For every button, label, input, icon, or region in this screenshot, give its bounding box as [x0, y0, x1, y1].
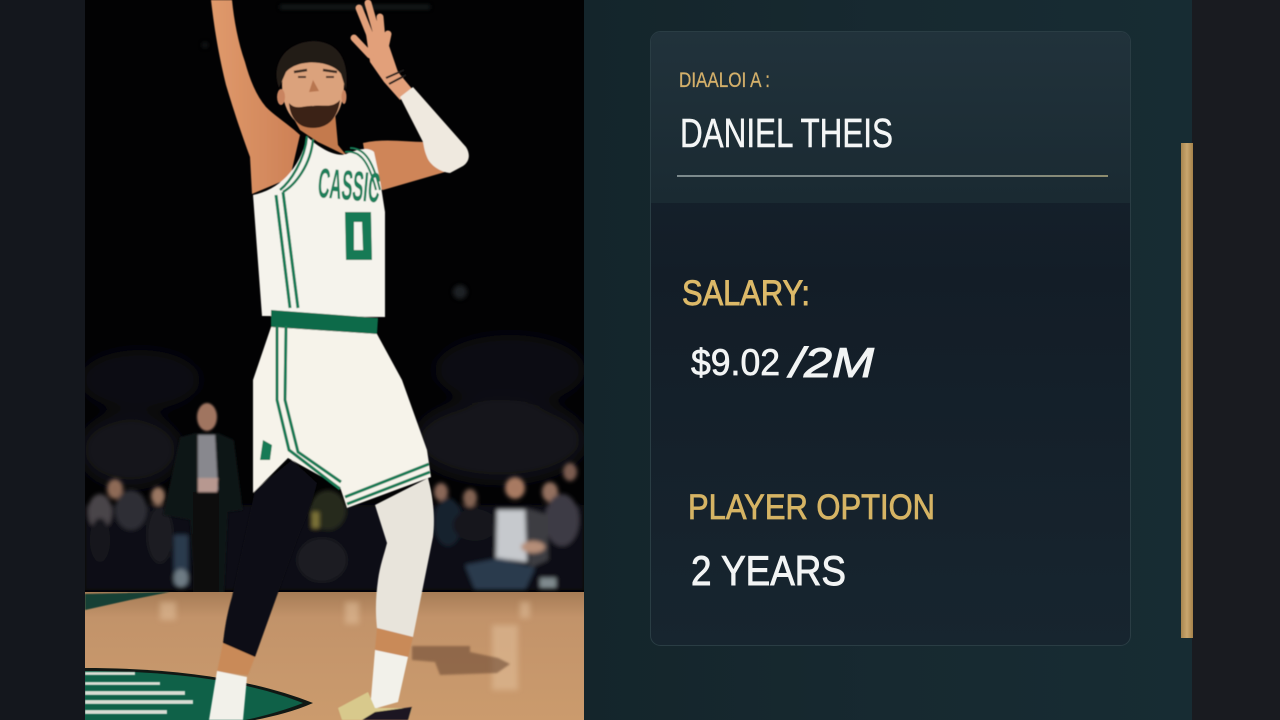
- right page margin: [1192, 0, 1280, 720]
- panel: stats background: [584, 0, 1193, 720]
- hardwood floor: [85, 592, 584, 720]
- raised left arm: [211, 0, 300, 194]
- salary value: /2M: [786, 339, 874, 386]
- salary label: SALARY:: [682, 274, 810, 313]
- crowd upper rows: [80, 335, 585, 485]
- shorts: [253, 327, 431, 508]
- shorts trim: [277, 326, 341, 489]
- upper right arm: [363, 140, 445, 190]
- arm sleeve: [400, 87, 469, 173]
- green sideline edge: [85, 592, 170, 610]
- player: CASSIC: [316, 159, 382, 211]
- card: [650, 32, 1130, 646]
- player: [209, 0, 469, 720]
- floor logo marking: [412, 646, 510, 675]
- contract length: 2 YEARS: [691, 547, 846, 594]
- left page margin: [0, 0, 85, 720]
- header rule: [677, 175, 1108, 177]
- raised right hand and forearm: [354, 3, 413, 100]
- jersey: [253, 136, 385, 317]
- card header band: [651, 32, 1130, 203]
- neck: [294, 116, 346, 156]
- salary value: [691, 339, 874, 386]
- contract label: PLAYER OPTION: [688, 488, 935, 527]
- salary value: $9.02: [691, 342, 780, 383]
- socks: [209, 650, 408, 720]
- white compression leg: [375, 478, 434, 637]
- wrist bands: [386, 70, 406, 84]
- head: [276, 41, 347, 128]
- waistband: [271, 310, 378, 334]
- player name: DANIEL THEIS: [680, 110, 893, 156]
- shoe: [338, 692, 412, 720]
- shorts logo: [260, 440, 272, 460]
- black tights leg: [223, 460, 317, 657]
- courtside coach: [163, 403, 243, 608]
- floor reflections: [160, 602, 530, 690]
- center court circle: [85, 668, 313, 720]
- panel: player photo: [80, 0, 585, 720]
- gold side bar: [1181, 143, 1193, 638]
- header label: DIAALOI A :: [679, 69, 770, 92]
- crowd front rows: [85, 463, 584, 590]
- jersey number: [345, 212, 372, 260]
- arena upper lights: [202, 5, 467, 299]
- lower legs: [217, 628, 413, 675]
